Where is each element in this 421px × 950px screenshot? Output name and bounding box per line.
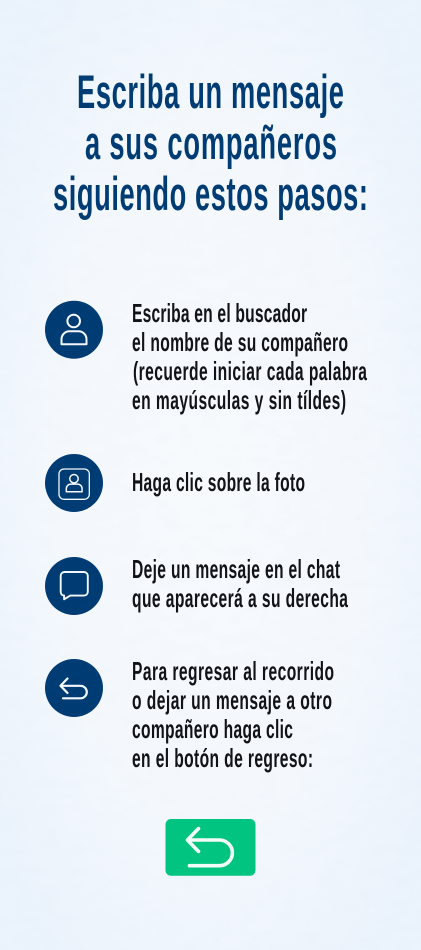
text: step 3: que aparecerá a su derecha <box>132 584 349 613</box>
text: step 1: en mayúsculas y sin tíldes) <box>132 386 346 415</box>
text: step 4 <box>132 657 334 773</box>
step 3 <box>45 555 349 615</box>
title: Escriba un mensaje <box>77 66 344 119</box>
text: step 1: el nombre de su compañero <box>132 328 348 357</box>
text: step 4: o dejar un mensaje a otro <box>132 686 332 715</box>
text: step 4: Para regresar al recorrido <box>132 657 334 686</box>
text: step 1 <box>132 299 368 415</box>
text: step 3 <box>132 555 349 613</box>
title: a sus compañeros <box>85 117 337 170</box>
text: step 4: en el botón de regreso: <box>132 744 313 773</box>
text: step 3: Deje un mensaje en el chat <box>132 555 340 584</box>
text: step 1: (recuerde iniciar cada palabra <box>133 357 368 386</box>
title: siguiendo estos pasos: <box>53 168 368 221</box>
step 1 <box>45 299 368 415</box>
icon: button arrow <box>188 828 232 866</box>
icon: photo profile <box>45 454 103 512</box>
text: step 1: Escriba en el buscador <box>132 299 307 328</box>
text: step 4: compañero haga clic <box>132 715 293 744</box>
icon: chat bubble <box>45 557 103 615</box>
icon: return arrow <box>45 659 103 717</box>
icon: user <box>45 301 103 359</box>
button: return <box>166 819 256 876</box>
step 4 <box>45 657 334 773</box>
text: step 2: Haga clic sobre la foto <box>132 468 305 497</box>
title <box>53 66 368 221</box>
step 2 <box>45 454 305 512</box>
